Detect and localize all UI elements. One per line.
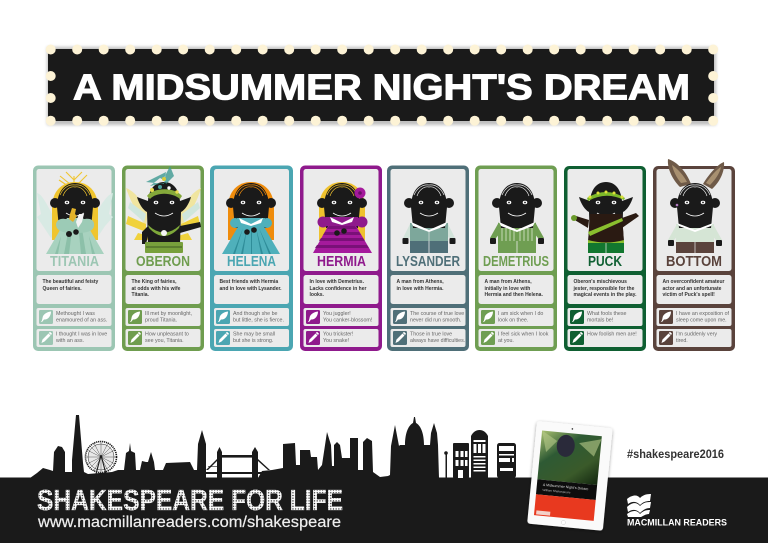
brand name: MACMILLAN READERS bbox=[627, 518, 727, 528]
character: Puck bbox=[571, 182, 639, 253]
quote: Bottom original: sleep come upon me. bbox=[676, 318, 727, 324]
icon: open book waves bbox=[627, 494, 651, 517]
character: Hermia bbox=[313, 182, 372, 253]
quote: Helena original bbox=[216, 310, 284, 324]
name: Helena: HELENA bbox=[227, 254, 276, 270]
quote: Bottom original: I have an exposition of bbox=[676, 311, 730, 317]
name: Oberon: OBERON bbox=[136, 254, 190, 270]
skyline silhouette bbox=[0, 415, 439, 478]
description: Demetrius: initially in love with bbox=[484, 286, 530, 292]
quote: Bottom simplified: tired. bbox=[676, 338, 688, 344]
London Eye bbox=[86, 442, 116, 474]
quote: Demetrius simplified: at you. bbox=[498, 338, 514, 344]
quote: Helena simplified bbox=[216, 331, 275, 345]
quote: Hermia simplified: You trickster! bbox=[323, 332, 353, 338]
quote: Oberon simplified: How unpleasant to bbox=[145, 332, 189, 338]
character: Bottom bbox=[668, 159, 724, 253]
quote: Titania simplified: with an ass. bbox=[56, 338, 84, 344]
description: Helena: and in love with Lysander. bbox=[220, 286, 282, 292]
quote: Demetrius original: I am sick when I do bbox=[498, 311, 543, 317]
quote: Oberon simplified bbox=[128, 331, 189, 345]
quote: Demetrius simplified bbox=[481, 331, 549, 345]
panel: Lysander card bbox=[387, 166, 469, 351]
character: Titania bbox=[37, 172, 113, 254]
title text: A MIDSUMMER NIGHT'S DREAM bbox=[73, 66, 690, 108]
description: Puck: jester, responsible for the bbox=[572, 286, 635, 292]
quote: Lysander original bbox=[393, 310, 464, 324]
footer heading: SHAKESPEARE FOR LIFE bbox=[37, 485, 343, 517]
description: Titania: The beautiful and feisty bbox=[42, 279, 99, 285]
marquee bulbs bbox=[46, 44, 718, 126]
description: Demetrius: Hermia and then Helena. bbox=[484, 292, 543, 298]
quote: Lysander simplified: Those in true love bbox=[410, 332, 452, 338]
footer band with London skyline bbox=[0, 415, 768, 543]
panel: Demetrius card bbox=[475, 166, 557, 351]
quote: Puck original: What fools these bbox=[587, 311, 627, 317]
quote: Lysander simplified: always have difficulties. bbox=[410, 338, 465, 344]
panel: Helena card bbox=[210, 166, 293, 351]
description: Hermia: In love with Demetrius. bbox=[310, 279, 365, 285]
quote: Bottom simplified: I'm suddenly very bbox=[676, 332, 717, 338]
quote: Hermia original: You canker-blossom! bbox=[323, 318, 372, 324]
description: Bottom: An overconfident amateur bbox=[662, 279, 725, 285]
book title: A Midsummer Night's Dream bbox=[543, 483, 589, 491]
character: Lysander bbox=[402, 183, 456, 253]
description: Bottom: actor and an unfortunate bbox=[662, 286, 722, 292]
quote: Lysander original: The course of true love bbox=[410, 311, 464, 317]
description: Hermia: Lacks confidence in her bbox=[310, 286, 367, 292]
description: Demetrius: A man from Athens, bbox=[484, 279, 532, 285]
quote: Titania simplified bbox=[39, 331, 107, 345]
quote: Helena original: And though she be bbox=[233, 311, 278, 317]
quote: Titania original bbox=[39, 310, 107, 324]
quote: Titania simplified: I thought I was in love bbox=[56, 332, 107, 338]
quote: Lysander original: never did run smooth. bbox=[410, 318, 461, 324]
quote: Puck original bbox=[570, 310, 627, 324]
tablet with book cover bbox=[527, 421, 613, 531]
panel: Hermia card bbox=[300, 166, 382, 351]
character: Helena bbox=[222, 182, 280, 254]
quote: Helena simplified: but she is strong. bbox=[233, 338, 273, 344]
description: Helena: Best friends with Hermia bbox=[220, 279, 278, 285]
panel: Bottom card bbox=[653, 159, 735, 351]
quote: Demetrius original bbox=[481, 310, 543, 324]
panel: Titania card bbox=[33, 166, 115, 351]
quote: Hermia original bbox=[306, 310, 372, 324]
description: Oberon: at odds with his wife bbox=[132, 286, 181, 292]
quote: Titania original: enamoured of an ass. bbox=[56, 318, 107, 324]
quote: Hermia simplified bbox=[306, 331, 353, 345]
quote: Puck simplified bbox=[570, 331, 637, 345]
description: Bottom: victim of Puck's spell! bbox=[662, 292, 715, 298]
name: Puck: PUCK bbox=[588, 254, 622, 270]
website address: www.macmillanreaders.com/shakespeare bbox=[37, 514, 341, 531]
quote: Helena simplified: She may be small bbox=[233, 332, 275, 338]
description: Lysander: in love with Hermia. bbox=[396, 286, 444, 292]
description: Hermia: looks. bbox=[310, 292, 325, 298]
description: Puck: Oberon's mischievous bbox=[574, 279, 627, 285]
name: Titania: TITANIA bbox=[50, 254, 99, 270]
quote: Hermia original: You juggler! bbox=[323, 311, 351, 317]
description: Titania: Queen of fairies. bbox=[42, 286, 82, 292]
quote: Titania original: Methought I was bbox=[56, 311, 95, 317]
quote: Bottom simplified bbox=[659, 331, 717, 345]
character: Oberon bbox=[126, 166, 201, 253]
description: Puck: magical events in the play. bbox=[574, 292, 637, 298]
description: Oberon: The King of fairies, bbox=[132, 279, 177, 285]
quote: Demetrius original: look on thee. bbox=[498, 318, 528, 324]
street buildings and bus bbox=[444, 430, 516, 478]
quote: Lysander simplified bbox=[393, 331, 465, 345]
name: Bottom: BOTTOM bbox=[666, 254, 722, 270]
panel: Oberon card bbox=[122, 166, 204, 351]
quote: Hermia simplified: You snake! bbox=[323, 338, 349, 344]
description: Lysander: A man from Athens, bbox=[396, 279, 444, 285]
character: Demetrius bbox=[490, 183, 544, 253]
hashtag: #shakespeare2016 bbox=[627, 449, 724, 461]
quote: Puck original: mortals be! bbox=[587, 318, 613, 324]
name: Lysander: LYSANDER bbox=[396, 254, 460, 270]
quote: Puck simplified: How foolish men are! bbox=[587, 332, 637, 338]
Tower Bridge bbox=[206, 447, 270, 478]
quote: Oberon simplified: see you, Titania. bbox=[145, 338, 184, 344]
book author: William Shakespeare bbox=[542, 488, 571, 495]
panel: Puck card bbox=[564, 166, 646, 351]
Macmillan Readers logo bbox=[627, 494, 727, 528]
quote: Oberon original: Ill met by moonlight, bbox=[145, 311, 192, 317]
quote: Helena original: but little, she is fierce. bbox=[233, 318, 284, 324]
description: Oberon: Titania. bbox=[132, 292, 150, 298]
name: Hermia: HERMIA bbox=[317, 254, 366, 270]
quote: Bottom original bbox=[659, 310, 730, 324]
title banner bbox=[46, 44, 718, 126]
name: Demetrius: DEMETRIUS bbox=[483, 254, 549, 270]
quote: Oberon original bbox=[128, 310, 192, 324]
quote: Demetrius simplified: I feel sick when I look bbox=[498, 332, 549, 338]
quote: Oberon original: proud Titania. bbox=[145, 318, 177, 324]
